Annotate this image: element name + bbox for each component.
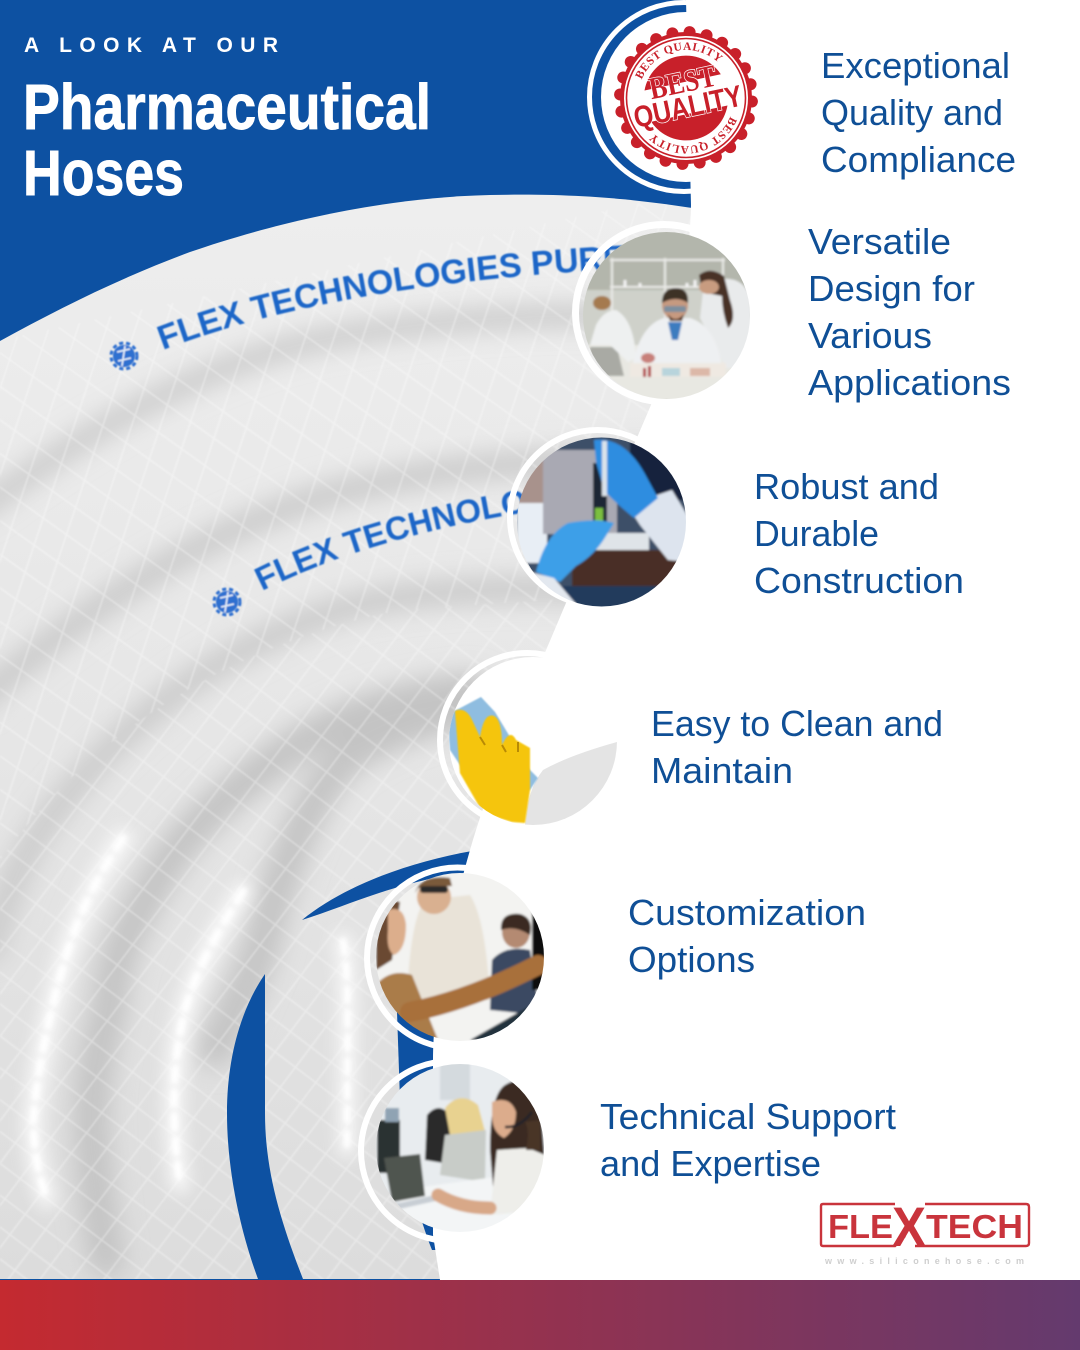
badge circle: best quality stamp <box>587 0 758 194</box>
braid pattern upper coils <box>0 190 700 860</box>
feature text: versatile design <box>808 221 1011 403</box>
feature text: technical support: and Expertise <box>600 1143 821 1184</box>
header title <box>23 71 431 209</box>
feature text: robust and durable: Durable <box>754 513 879 554</box>
badge circle: blue gloves lab photo <box>510 430 690 610</box>
blue arch behind hose end <box>302 851 472 920</box>
feature text: technical support: Technical Support <box>600 1096 896 1137</box>
hose printed lettering line one: FLEX TECHNOLOGIES PURE <box>156 244 622 350</box>
icon: red best quality stamp: QUALITY <box>631 80 745 135</box>
feature text: exceptional quality: Compliance <box>821 139 1016 180</box>
badge circle: lab scientists photo <box>576 224 755 405</box>
feature text: versatile design: Versatile <box>808 221 951 262</box>
header eyebrow: A LOOK AT OUR <box>24 34 278 57</box>
feature text: customization options: Options <box>628 939 755 980</box>
feature text: robust and durable <box>754 466 964 601</box>
feature text: easy to clean: Easy to Clean and <box>651 703 943 744</box>
feature text: easy to clean: Maintain <box>651 750 793 791</box>
blue right curve beside hose end <box>397 1012 445 1250</box>
feature text: robust and durable: Robust and <box>754 466 939 507</box>
icon: red best quality stamp: BEST <box>646 58 720 106</box>
flextech logo: FLE <box>828 1208 893 1245</box>
feature text: easy to clean <box>651 703 943 791</box>
braid pattern lower coils <box>0 601 552 1279</box>
blue left curve beside hose end <box>227 974 303 1279</box>
white right panel <box>433 0 1080 1280</box>
feature text: exceptional quality: Quality and <box>821 92 1003 133</box>
blue header background <box>0 0 692 1280</box>
flextech logo: TECH <box>926 1208 1023 1245</box>
badge circle: team at computer photo <box>367 868 548 1048</box>
feature text: versatile design: Applications <box>808 362 1011 403</box>
hose photo background <box>0 194 691 1279</box>
icon: red best quality stamp <box>614 26 758 170</box>
icon: hose brand mark two <box>214 589 240 615</box>
icon: red best quality stamp: BEST QUALITY <box>648 116 737 154</box>
flextech logo: X <box>892 1195 926 1258</box>
feature text: exceptional quality <box>821 45 1016 180</box>
flextech logo: www.siliconehose.com <box>824 1256 1024 1266</box>
feature text: versatile design: Design for <box>808 268 975 309</box>
header title: Pharmaceutical <box>23 71 431 143</box>
feature text: technical support <box>600 1096 896 1184</box>
footer gradient bar <box>0 1280 1080 1350</box>
feature text: robust and durable: Construction <box>754 560 964 601</box>
header title: Hoses <box>23 137 184 209</box>
flextech logo <box>821 1195 1029 1266</box>
icon: red best quality stamp: BEST QUALITY <box>635 42 724 80</box>
feature text: versatile design: Various <box>808 315 932 356</box>
badge circle: cleaning glove photo <box>440 653 625 830</box>
feature text: exceptional quality: Exceptional <box>821 45 1010 86</box>
badge circle: support agent photo <box>361 1060 548 1241</box>
feature text: customization options: Customization <box>628 892 866 933</box>
icon: hose brand mark one <box>111 343 137 369</box>
feature text: customization options <box>628 892 866 980</box>
